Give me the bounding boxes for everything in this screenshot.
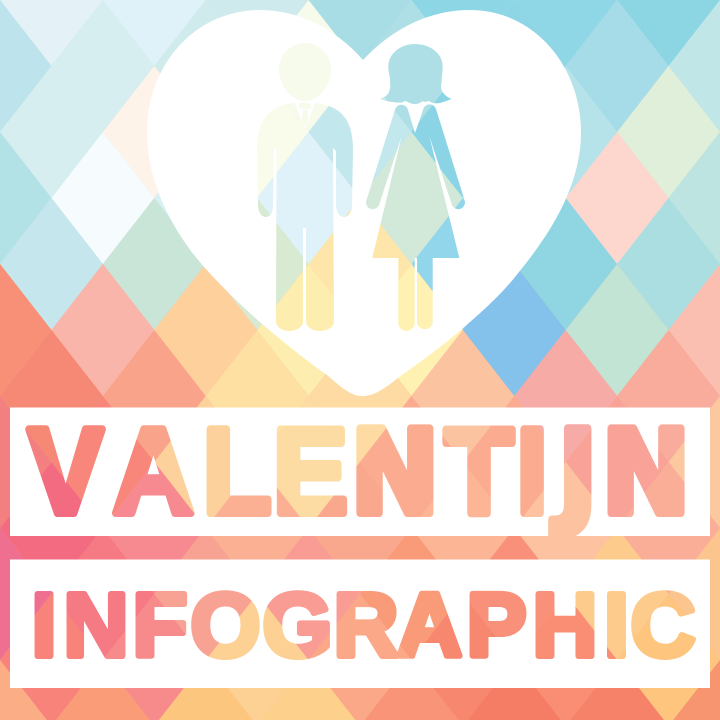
heart: [147, 10, 581, 396]
panel: top title bar: [10, 408, 710, 536]
man head: [279, 43, 331, 101]
man body in suit: [257, 103, 353, 331]
icon: man figure: [257, 43, 353, 331]
woman dress, arms and legs: [366, 104, 465, 331]
panel: bottom subtitle bar: [10, 560, 710, 688]
title: VALENTIJN: VALENTIJN: [28, 403, 691, 541]
icon: woman figure: [366, 44, 465, 331]
subtitle: INFOGRAPHIC: INFOGRAPHIC: [31, 576, 696, 676]
man tie: [299, 103, 311, 127]
woman hair and head: [380, 44, 452, 104]
